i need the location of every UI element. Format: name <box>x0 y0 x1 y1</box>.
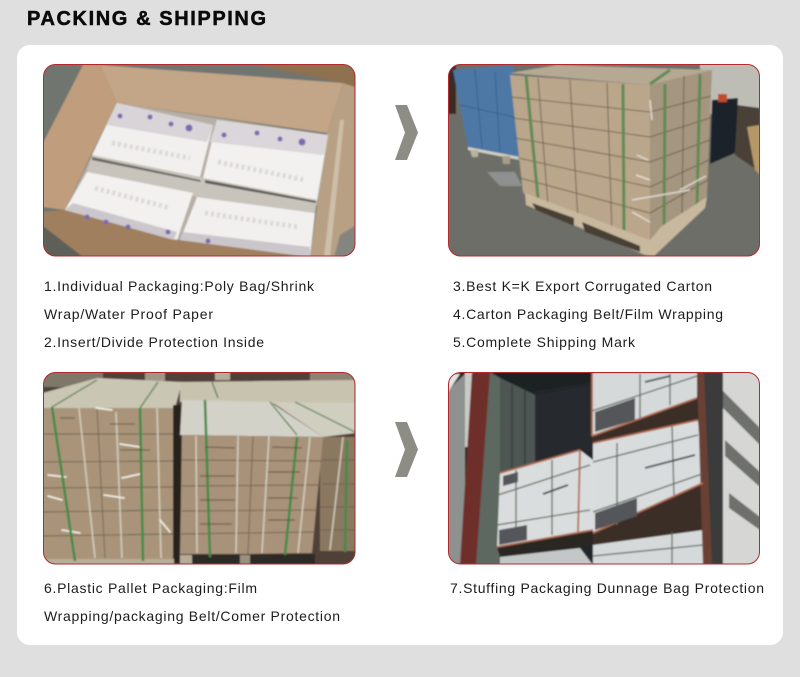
text: step 7: 7.Stuffing Packaging Dunnage Bag Protection <box>450 580 764 596</box>
photo: pallet of export cartons <box>448 64 760 257</box>
photo: carton with packaged items <box>43 64 356 257</box>
photo: pallets wrapped with film and belts <box>43 372 356 565</box>
arrow: chevron bottom <box>395 422 418 477</box>
title: PACKING & SHIPPING <box>27 8 266 30</box>
arrow: chevron top <box>395 105 418 160</box>
text: steps 3 to 5 <box>453 278 723 350</box>
text: steps 1 and 2: Wrap/Water Proof Paper <box>44 306 213 322</box>
text: step 6 <box>44 580 340 624</box>
text: steps 1 and 2 <box>44 278 315 350</box>
photo: container stuffing <box>448 372 761 565</box>
text: steps 3 to 5: 3.Best K=K Export Corrugated Carton <box>453 278 712 294</box>
text: steps 3 to 5: 5.Complete Shipping Mark <box>453 334 636 350</box>
text: step 6: Wrapping/packaging Belt/Comer Protection <box>44 608 340 624</box>
text: steps 1 and 2: 1.Individual Packaging:Poly Bag/Shrink <box>44 278 315 294</box>
text: steps 1 and 2: 2.Insert/Divide Protection Inside <box>44 334 264 350</box>
text: step 6: 6.Plastic Pallet Packaging:Film <box>44 580 257 596</box>
text: steps 3 to 5: 4.Carton Packaging Belt/Film Wrapping <box>453 306 723 322</box>
